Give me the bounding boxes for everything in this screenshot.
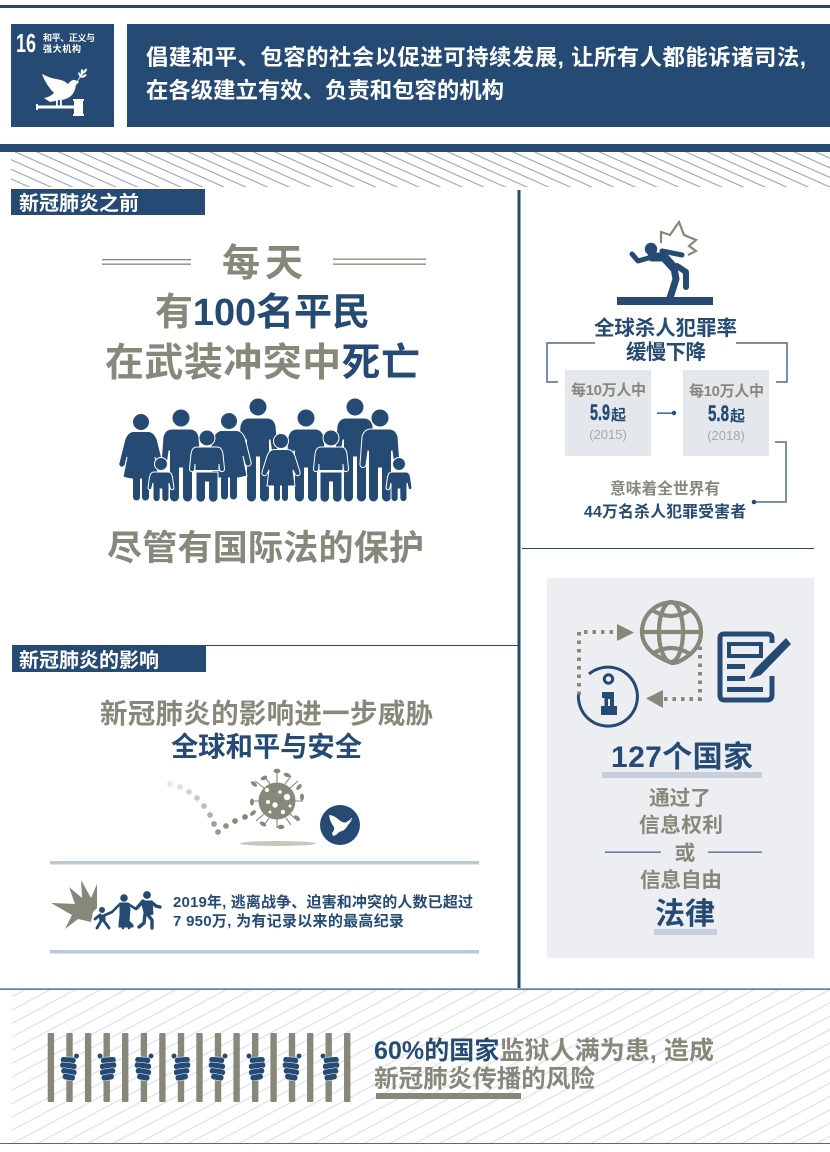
icon: dove and gavel [36,68,88,116]
law text: 信息自由 [640,868,722,892]
impact heading [100,698,433,762]
statement: protection: 尽管有国际法的保护 [107,529,424,568]
headline line 3: 在武装冲突中死亡 [105,342,420,385]
stat box 2018: (2018) [707,428,745,443]
headline ornament lines [102,258,426,265]
impact heading: 全球和平与安全 [171,731,362,762]
header banner: 在各级建立有效、负责和包容的机构 [146,77,504,103]
brackets [547,343,787,502]
victims text: 意味着全世界有 [610,479,720,498]
homicide section [547,222,787,521]
goal name: 强大机构 [43,43,81,54]
prison text: 60%的国家监狱人满为患, 造成 [374,1037,714,1065]
goal badge [11,24,114,127]
icon: globe [642,602,701,663]
prison text [374,1037,714,1099]
icon: document and pen [720,634,791,700]
homicide heading: 全球杀人犯罪率 [594,316,737,340]
icon: prison bars with hands [48,1033,350,1102]
refugees callout [50,861,479,954]
shadow [240,841,316,846]
law text: 或 [675,841,696,865]
impact heading: 新冠肺炎的影响进一步威胁 [100,698,433,729]
stat box 2018: 起 [730,408,745,425]
vertical divider [518,190,520,988]
homicide heading: 缓慢下降 [626,341,706,364]
prison text: 新冠肺炎传播的风险 [374,1065,595,1093]
headline line 1: 每天 [222,243,303,285]
stat box 2018: 5.8 [708,401,729,426]
stat box 2015: 每10万人中 [571,381,646,399]
icon: dotted arrows [579,624,700,708]
arrow between boxes [657,411,676,415]
section label: before: 新冠肺炎之前 [19,191,139,215]
icon: explosion [51,880,97,929]
law text: 信息权利 [639,813,723,837]
icon: virus hitting peace [167,769,360,846]
refugees text: 2019年, 逃离战争、迫害和冲突的人数已超过 [173,893,473,911]
stat box 2018 [683,370,769,456]
dove badge [320,805,360,845]
stat box 2015: 5.9 [590,400,610,425]
right divider [522,548,814,549]
section label: before [11,189,205,215]
refugees text [173,893,473,930]
hatched band top [11,152,830,187]
stat box 2015 [565,370,651,456]
stat box 2018: 每10万人中 [689,382,764,400]
header banner [127,24,830,127]
header banner: 倡建和平、包容的社会以促进可持续发展, 让所有人都能诉诸司法, [146,44,806,70]
stat box 2015: (2015) [589,427,627,442]
headline line 2: 有100名平民 [155,292,370,334]
header divider bar [0,144,830,152]
virus [249,769,304,829]
top rule [0,5,830,8]
icon: person falling [617,222,713,305]
headline [102,243,426,385]
law text: 通过了 [649,787,711,810]
section divider [12,645,518,646]
bottom hatched panel [0,988,830,1144]
goal name [43,32,95,54]
goal number: 16 [16,28,36,58]
panel: right to information [547,578,814,958]
count heading: 127个国家 [611,741,753,774]
icon: info [578,667,637,726]
stat box 2015: 起 [611,407,626,424]
victims text [584,479,746,521]
icon: fleeing family [95,892,160,928]
homicide heading [594,316,737,364]
law text [605,787,762,935]
icon: crowd of civilians [119,398,412,502]
bouncing dots [167,781,248,835]
victims text: 44万名杀人犯罪受害者 [584,502,746,521]
law text: 法律 [655,898,715,931]
goal name: 和平、正义与 [43,32,95,43]
refugees text: 7 950万, 为有记录以来的最高纪录 [173,912,404,930]
section label: impact: 新冠肺炎的影响 [19,649,159,672]
section label: impact [12,646,206,672]
